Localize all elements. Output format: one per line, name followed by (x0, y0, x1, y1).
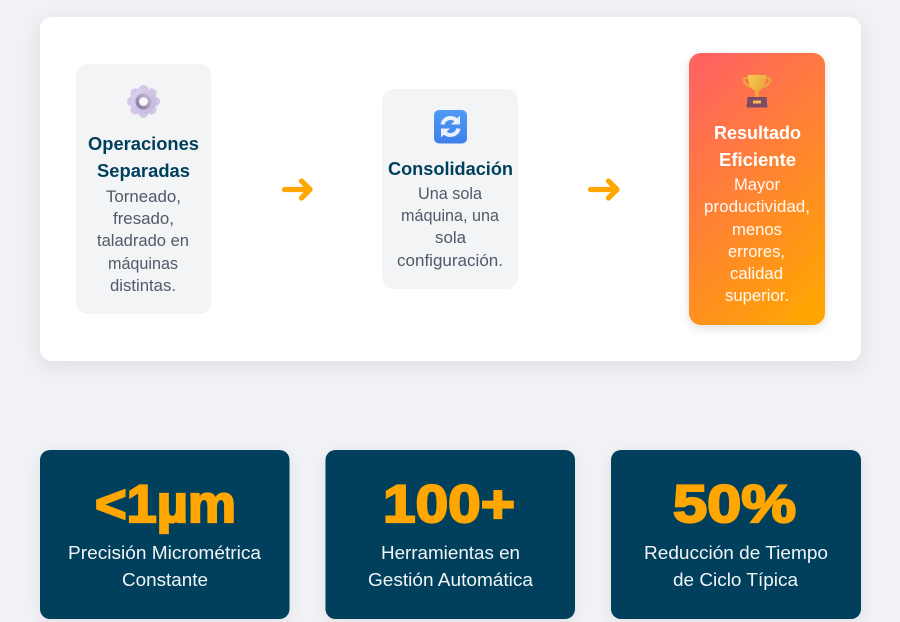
stat label: precision: Constante (122, 570, 208, 590)
stat number: reduccion: 50% (673, 475, 796, 534)
icon: gear (127, 85, 160, 118)
description: resultado eficiente: superior. (725, 287, 789, 305)
description: resultado eficiente: menos (732, 221, 782, 239)
heading: consolidacion: Consolidación (388, 158, 513, 179)
icon: refresh (434, 110, 467, 144)
heading: resultado eficiente (714, 122, 801, 170)
arrow: second (590, 181, 617, 198)
description: consolidacion: sola (435, 229, 467, 247)
stat label: reduccion (644, 543, 828, 590)
stat card: reduccion (611, 450, 861, 619)
heading: operaciones separadas: Operaciones (88, 133, 199, 154)
description: resultado eficiente: productividad, (704, 198, 810, 216)
stat label: herramientas (368, 543, 534, 590)
heading: resultado eficiente: Eficiente (719, 149, 796, 170)
stat label: herramientas: Gestión Automática (368, 570, 534, 590)
stat number: herramientas: 100+ (383, 475, 515, 534)
description: operaciones separadas: Torneado, (106, 188, 181, 206)
stat label: precision: Precisión Micrométrica (68, 543, 262, 563)
description: resultado eficiente: Mayor (734, 176, 781, 194)
description: resultado eficiente (704, 176, 810, 305)
stat label: reduccion: Reducción de Tiempo (644, 543, 828, 563)
description: operaciones separadas (97, 188, 189, 295)
description: operaciones separadas: distintas. (110, 277, 176, 295)
description: operaciones separadas: máquinas (108, 255, 178, 273)
panel: process flow (40, 17, 861, 361)
stat number: precision: <1µm (95, 475, 236, 534)
description: consolidacion: Una sola (418, 185, 483, 203)
arrow: first (284, 181, 310, 198)
stat card: herramientas (326, 450, 575, 619)
heading: operaciones separadas (88, 133, 199, 181)
heading: operaciones separadas: Separadas (97, 160, 190, 181)
stat label: precision (68, 543, 262, 590)
description: consolidacion: máquina, una (401, 207, 500, 225)
icon: trophy (744, 75, 770, 108)
stat label: herramientas: Herramientas en (381, 543, 520, 563)
card: resultado eficiente (689, 53, 825, 325)
heading: resultado eficiente: Resultado (714, 122, 801, 143)
stat label: reduccion: de Ciclo Típica (673, 570, 799, 590)
description: operaciones separadas: taladrado en (97, 232, 189, 250)
card: operaciones separadas (76, 64, 212, 314)
stat card: precision (40, 450, 290, 619)
card: consolidacion (382, 89, 518, 289)
description: resultado eficiente: calidad (730, 265, 783, 283)
description: consolidacion (397, 185, 503, 270)
description: resultado eficiente: errores, (728, 243, 785, 261)
description: operaciones separadas: fresado, (113, 210, 174, 228)
description: consolidacion: configuración. (397, 252, 503, 270)
